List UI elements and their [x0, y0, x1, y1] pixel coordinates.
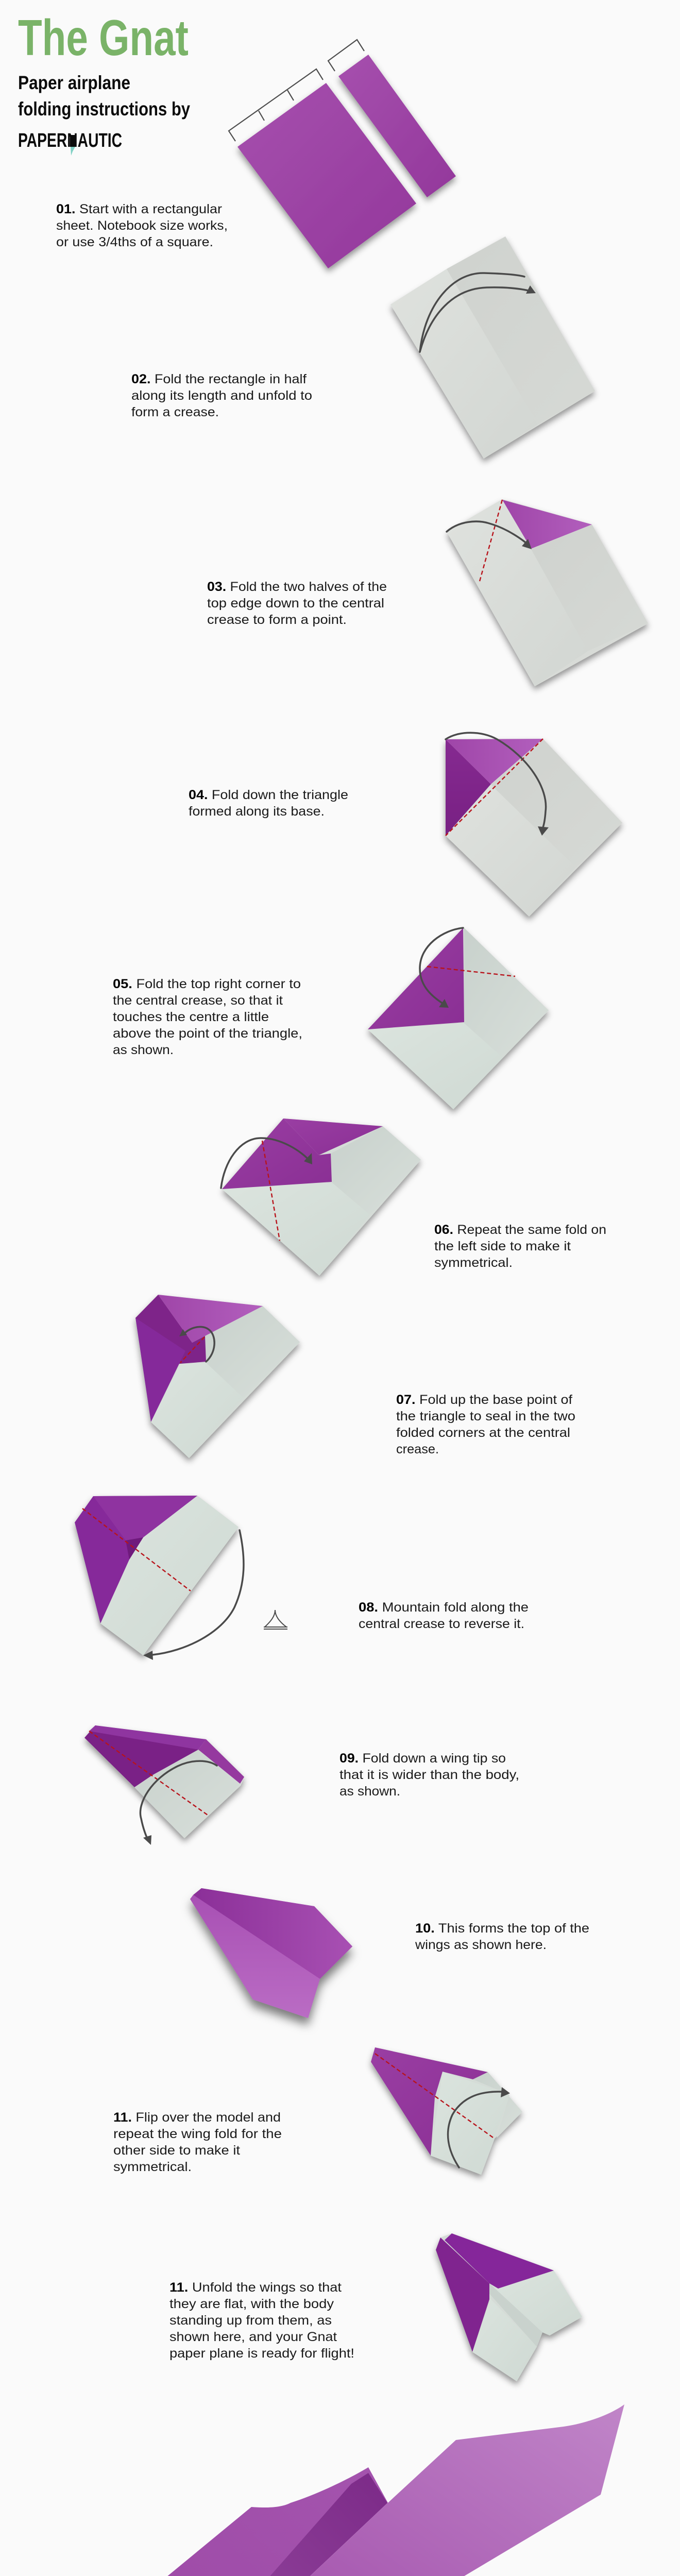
step 07 text: folded corners at the central: [396, 1426, 570, 1440]
right white panel: [331, 1126, 421, 1215]
inner dark purple: [135, 1295, 206, 1365]
arrow: [152, 1530, 244, 1655]
step 11 flip text: symmetrical.: [113, 2160, 192, 2174]
purple strip: [338, 55, 456, 197]
left purple wing: [436, 2238, 489, 2352]
step 04 text: formed along its base.: [189, 804, 325, 819]
step 11 flip text: 11. Flip over the model and: [113, 2110, 281, 2125]
step 11 final text: they are flat, with the body: [169, 2297, 334, 2311]
upper purple wing: [445, 2233, 554, 2289]
step 05 text: as shown.: [113, 1043, 174, 1057]
step 01 text: [56, 202, 228, 249]
step 02 creased sheet: [390, 236, 595, 459]
arrow: [221, 1138, 309, 1188]
step 01 text: sheet. Notebook size works,: [56, 218, 228, 233]
right panel: [531, 524, 648, 651]
lower white panel: [151, 1363, 243, 1458]
arrow: [140, 1761, 217, 1839]
step 08 text: central crease to reverse it.: [359, 1617, 524, 1631]
right white panel: [464, 928, 549, 1058]
step 02 text: [131, 372, 312, 419]
step 07 text: the triangle to seal in the two: [396, 1409, 575, 1423]
step 06 text: 06. Repeat the same fold on: [434, 1223, 606, 1237]
step 08 text: [359, 1600, 529, 1631]
step 05 corner to crease: [368, 928, 549, 1109]
fold line: [180, 1337, 205, 1363]
left flap: [135, 1318, 185, 1422]
subtitle: Paper airplane: [18, 72, 130, 93]
step 11 flip and repeat: [371, 2047, 522, 2175]
lower white panel: [446, 785, 576, 917]
step 03 text: 03. Fold the two halves of the: [207, 580, 387, 594]
dark purple flap: [446, 739, 491, 836]
right purple strip: [198, 1739, 244, 1784]
step 06 text: the left side to make it: [434, 1239, 571, 1253]
step 02 text: 02. Fold the rectangle in half: [131, 372, 307, 386]
step 11 final text: 11. Unfold the wings so that: [169, 2280, 342, 2295]
right white wing: [489, 2270, 582, 2335]
step 03 text: [207, 580, 387, 627]
subtitle: PAPERNAUTIC: [18, 130, 122, 151]
step 07 text: crease.: [396, 1442, 439, 1456]
lower white wing: [472, 2299, 537, 2381]
step 07 text: [396, 1393, 575, 1456]
step 02 text: form a crease.: [131, 405, 219, 419]
bracket: one quarter: [328, 40, 364, 71]
step 01 text: or use 3/4ths of a square.: [56, 235, 213, 249]
right half: [447, 236, 595, 425]
large purple sheet: [237, 83, 416, 268]
right white panel: [205, 1306, 300, 1398]
step 07 base point fold: [135, 1295, 300, 1458]
purple triangle: [502, 500, 592, 549]
dark purple body: [84, 1725, 198, 1787]
step 01 sheets with ruler brackets: [229, 40, 456, 268]
purple wing: [371, 2047, 488, 2156]
step 03 text: crease to form a point.: [207, 613, 347, 627]
subtitle: [18, 72, 190, 156]
step 09 text: 09. Fold down a wing tip so: [339, 1751, 506, 1766]
upper flap: [158, 1295, 263, 1343]
step 09 text: that it is wider than the body,: [339, 1768, 519, 1782]
upper right panel: [491, 739, 622, 868]
step 04 triangle fold: [446, 733, 622, 917]
fold line: [82, 1509, 191, 1591]
step 11 final text: paper plane is ready for flight!: [169, 2346, 354, 2361]
fold line: [427, 967, 515, 976]
step 06 text: symmetrical.: [434, 1256, 513, 1270]
step 11 final text: shown here, and your Gnat: [169, 2330, 337, 2344]
step 11 final text: standing up from them, as: [169, 2313, 332, 2328]
step 11 flip text: [113, 2110, 282, 2174]
step 08 text: 08. Mountain fold along the: [359, 1600, 529, 1615]
step 11 unfolded wings: [436, 2233, 582, 2381]
bracket: three quarters: [229, 69, 323, 141]
back wing pale: [473, 2072, 522, 2138]
step 05 text: the central crease, so that it: [113, 993, 283, 1008]
step 11 flip text: other side to make it: [113, 2143, 240, 2158]
step 11 final text: [169, 2280, 354, 2361]
purple folded flap: [283, 1118, 383, 1155]
left wing: [59, 2467, 388, 2576]
step 09 wing tip fold: [84, 1725, 244, 1845]
fold line: [479, 500, 502, 583]
step 01 text: 01. Start with a rectangular: [56, 202, 222, 216]
fold line: [89, 1731, 209, 1816]
step 08 mountain fold: [75, 1496, 244, 1660]
arrow: [448, 2092, 502, 2167]
arrow: [447, 521, 529, 545]
finished paper plane photo: [57, 2404, 624, 2576]
subtitle: folding instructions by: [18, 98, 190, 120]
step 10 text: wings as shown here.: [415, 1938, 547, 1952]
step 10 text: [415, 1921, 589, 1952]
right wing: [110, 2404, 624, 2576]
upper purple edge: [89, 1725, 206, 1750]
step 03 text: top edge down to the central: [207, 596, 384, 611]
upper wing shaded: [193, 1888, 352, 1979]
centre dark fold: [126, 1537, 143, 1560]
step 05 text: [113, 977, 302, 1057]
white panel: [100, 1496, 239, 1655]
step 04 text: [189, 788, 348, 819]
step 11 flip text: repeat the wing fold for the: [113, 2127, 282, 2141]
step 03 corner fold: [447, 499, 648, 686]
step 09 text: as shown.: [339, 1784, 400, 1799]
purple triangle: [368, 928, 464, 1029]
fold line: [375, 2054, 495, 2139]
step 02 text: along its length and unfold to: [131, 388, 312, 403]
light purple flap: [446, 739, 543, 784]
step 09 text: [339, 1751, 519, 1799]
title: The Gnat: [18, 9, 189, 66]
step 04 text: 04. Fold down the triangle: [189, 788, 348, 802]
upper purple flap: [93, 1496, 197, 1540]
icon: mountain fold symbol: [264, 1610, 287, 1629]
step 10 text: 10. This forms the top of the: [415, 1921, 589, 1936]
lower wing light: [190, 1895, 320, 2018]
step 06 text: [434, 1223, 606, 1270]
step 05 text: touches the centre a little: [113, 1010, 269, 1024]
purple body: [75, 1496, 197, 1623]
step 07 text: 07. Fold up the base point of: [396, 1393, 572, 1407]
left panel: [447, 499, 588, 686]
step 10 wing top: [190, 1888, 352, 2018]
fold line: [446, 739, 543, 836]
fold and unfold arrows: [420, 273, 524, 352]
purple left side: [222, 1118, 332, 1189]
white panel: [134, 1750, 240, 1838]
step 05 text: 05. Fold the top right corner to: [113, 977, 301, 991]
lower white panel: [368, 1023, 503, 1109]
arrow: [184, 1327, 214, 1362]
fold line: [262, 1141, 280, 1241]
arrow: [420, 928, 463, 1004]
step 05 text: above the point of the triangle,: [113, 1026, 302, 1041]
lower white panel: [222, 1182, 370, 1276]
step 06 left corner fold: [221, 1118, 421, 1276]
front white panel: [431, 2072, 509, 2175]
centre body fold: [489, 2283, 542, 2347]
left half: [390, 269, 538, 459]
arrow: [446, 733, 546, 827]
central spine groove: [93, 2473, 387, 2576]
